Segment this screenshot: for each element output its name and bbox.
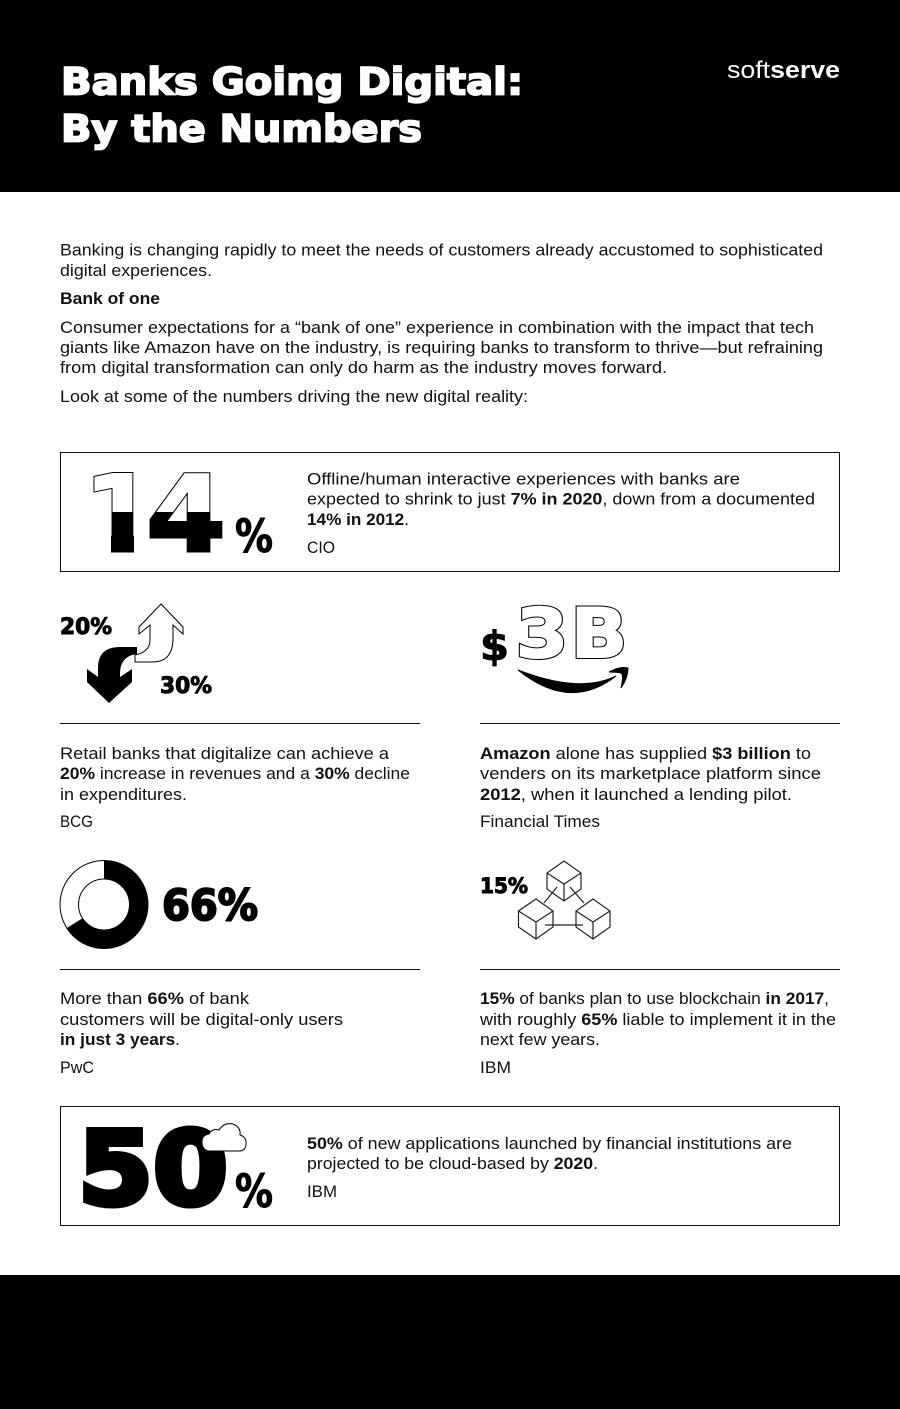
panel text: PwC (60, 1058, 94, 1077)
intro text: Banking is changing rapidly to meet the needs of customers already accustomed to sophisticated (60, 240, 823, 260)
icon: down arrow solid (87, 647, 137, 703)
intro text (60, 240, 823, 406)
icon: cloud (202, 1124, 246, 1151)
panel text: expected to shrink to just 7% in 2020 , down from a documented (307, 490, 815, 508)
percent sign: % (235, 510, 273, 563)
panel text: 14% in 2012. (307, 510, 409, 529)
big number 14 half filled: 4 (146, 453, 226, 576)
big number 14 half filled: 1 (83, 453, 157, 576)
big number 50: 50 (78, 1110, 228, 1229)
panel text: 2012, when it launched a lending pilot. (480, 785, 792, 804)
panel text: in expenditures. (60, 785, 187, 804)
panel text (60, 989, 343, 1077)
panel text: CIO (307, 538, 335, 557)
stat: 66%: 66% (162, 881, 258, 931)
panel text: projected to be cloud-based by 2020. (307, 1154, 598, 1173)
panel: Amazon 3 billion (480, 595, 840, 831)
panel: revenues and expenditures (60, 604, 420, 831)
panel text: next few years. (480, 1030, 600, 1049)
panel: blockchain (479, 861, 840, 1077)
panel text (60, 744, 410, 831)
big outlined 3B: B (571, 595, 627, 674)
intro text: Consumer expectations for a “bank of one” experience in combination with the impact that tech (60, 318, 814, 337)
stat: 15%: 15% (480, 874, 528, 898)
panel text (479, 989, 836, 1077)
logo: softserve: softserve (727, 57, 840, 84)
stat: 20%: 20% (60, 615, 112, 640)
intro text: giants like Amazon have on the industry, is requiring banks to transform to thrive—but refraining (60, 338, 823, 357)
big number 14 half filled: 1 (83, 453, 157, 576)
panel: 50 percent cloud (60, 1106, 840, 1229)
panel text: Financial Times (480, 812, 600, 831)
icon: amazon smile (518, 668, 628, 693)
big number 14 half filled (93, 472, 222, 552)
title: Banks Going Digital: (61, 60, 523, 104)
big outlined 3B: 3 (516, 595, 568, 674)
panel text: 15% of banks plan to use blockchain in 2017, (480, 989, 829, 1008)
intro text: Bank of one (60, 289, 160, 308)
intro text: Look at some of the numbers driving the new digital reality: (60, 387, 528, 406)
stat: 30%: 30% (160, 674, 212, 699)
panel text: 50% of new applications launched by financial institutions are (307, 1134, 792, 1153)
big number 14 half filled: 4 (146, 453, 226, 576)
panel text: Amazon alone has supplied $3 billion to (480, 744, 811, 763)
panel: 14 percent (60, 452, 840, 576)
panel text: in just 3 years. (60, 1030, 180, 1049)
panel text (307, 1134, 792, 1201)
panel text: IBM (480, 1058, 511, 1077)
title: By the Numbers (61, 108, 422, 150)
header band (0, 0, 900, 192)
footer band (0, 1275, 900, 1409)
panel text: More than 66% of bank (60, 989, 250, 1008)
big outlined 3B: B (571, 595, 627, 674)
icon: up arrow outline (135, 604, 183, 662)
percent sign: % (235, 1165, 273, 1218)
title (61, 60, 523, 150)
dollar sign: $ (480, 624, 509, 670)
chart: donut 66 percent (60, 860, 148, 948)
panel text: Offline/human interactive experiences with banks are (307, 470, 740, 488)
intro text: from digital transformation can only do harm as the industry moves forward. (60, 358, 667, 377)
panel text: Retail banks that digitalize can achieve a (60, 744, 390, 763)
icon: blockchain cubes (518, 861, 610, 939)
panel text (307, 470, 815, 557)
panel text: IBM (307, 1182, 337, 1201)
big outlined 3B: 3 (516, 595, 568, 674)
intro text: digital experiences. (60, 261, 212, 280)
panel text: venders on its marketplace platform since (480, 764, 821, 783)
panel text: customers will be digital-only users (60, 1010, 343, 1029)
big outlined 3B (516, 595, 627, 674)
panel text: with roughly 65% liable to implement it in the (479, 1010, 836, 1029)
panel: digital-only users (60, 860, 420, 1077)
panel text: BCG (60, 812, 93, 831)
panel text: 20% increase in revenues and a 30% decline (60, 764, 410, 783)
panel text (480, 744, 821, 831)
